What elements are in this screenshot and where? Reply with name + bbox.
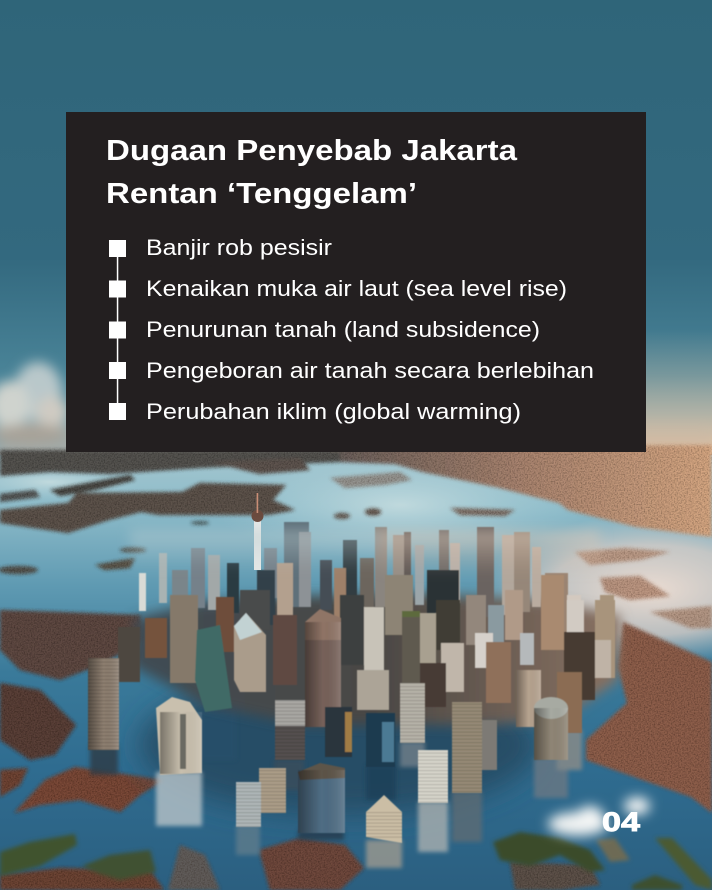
cause 5: Perubahan iklim (global warming) <box>146 399 521 424</box>
tv tower landmark <box>252 493 264 570</box>
dense city base mass <box>130 594 620 725</box>
cause 4: Pengeboran air tanah secara berlebihan <box>146 358 594 383</box>
sky <box>0 0 712 470</box>
heading: Dugaan Penyebab Jakarta <box>106 135 518 167</box>
city haze <box>130 530 600 575</box>
clouds on the horizon <box>0 362 68 444</box>
city skyline: front rows <box>88 609 582 843</box>
cause 3: Penurunan tanah (land subsidence) <box>146 317 540 342</box>
cause 2: Kenaikan muka air laut (sea level rise) <box>146 276 567 301</box>
connector line between bullets <box>117 248 118 411</box>
land masses <box>0 445 712 890</box>
heading <box>106 135 518 210</box>
cause 1: Banjir rob pesisir <box>146 235 332 260</box>
coastal green vegetation <box>0 832 712 890</box>
city skyline: middle rows <box>118 575 615 712</box>
heading: Rentan ‘Tenggelam’ <box>106 178 417 210</box>
page number: 04 <box>602 807 640 837</box>
flood water <box>0 450 712 890</box>
building reflections <box>90 710 582 868</box>
clouds reflected in the water <box>548 797 650 836</box>
dark flooded water around the towers <box>140 675 540 815</box>
panel: causes <box>66 112 646 452</box>
list of causes <box>109 235 594 424</box>
city skyline: far rows <box>139 522 614 655</box>
